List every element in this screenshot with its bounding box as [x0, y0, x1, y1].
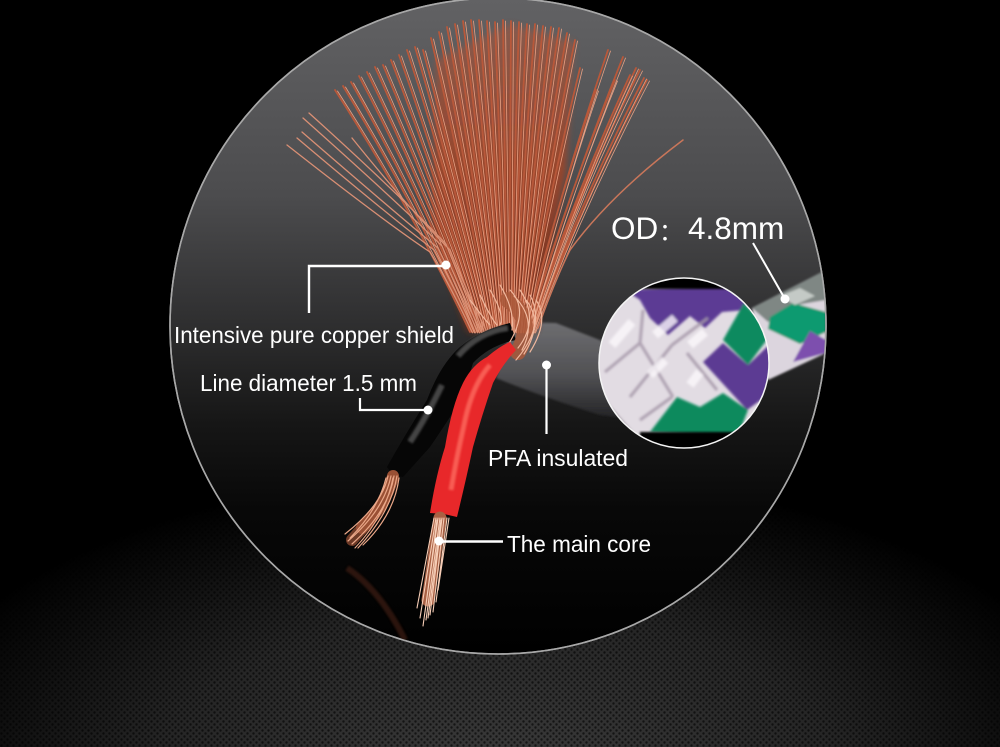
copper knot at fan root: [470, 285, 542, 360]
callout: outer diameter: [611, 210, 790, 304]
reflection of wire tip: [347, 568, 405, 640]
grey insulated jacket: [496, 322, 616, 417]
black wire: [387, 323, 516, 477]
callout: intensive pure copper shield: [174, 260, 454, 348]
red wire: [430, 342, 516, 517]
callout: intensive pure copper shield: Intensive pure copper shield: [174, 322, 454, 348]
copper strand fan: [287, 20, 683, 333]
braid weave shading: [605, 310, 717, 420]
callout: PFA insulated: PFA insulated: [488, 445, 628, 471]
callout: outer diameter: 4.8mm: [688, 210, 784, 246]
black wire copper tip: [345, 476, 399, 548]
callout: PFA insulated: [488, 360, 628, 471]
braided outer cable: [752, 270, 826, 380]
magnifier lens: braid close-up: [598, 277, 770, 449]
callout: line diameter: [200, 370, 432, 414]
callout: outer diameter: OD: [611, 210, 658, 246]
callout: outer diameter: ：: [659, 212, 683, 247]
panel: circular product photo: [170, 0, 826, 654]
red wire copper tip: [417, 518, 449, 626]
far-left loose strands: [287, 113, 487, 332]
lone long strand: [538, 140, 683, 328]
callout: the main core: The main core: [507, 531, 651, 557]
callout: the main core: [434, 531, 651, 557]
callout: line diameter: Line diameter 1.5 mm: [200, 370, 417, 396]
